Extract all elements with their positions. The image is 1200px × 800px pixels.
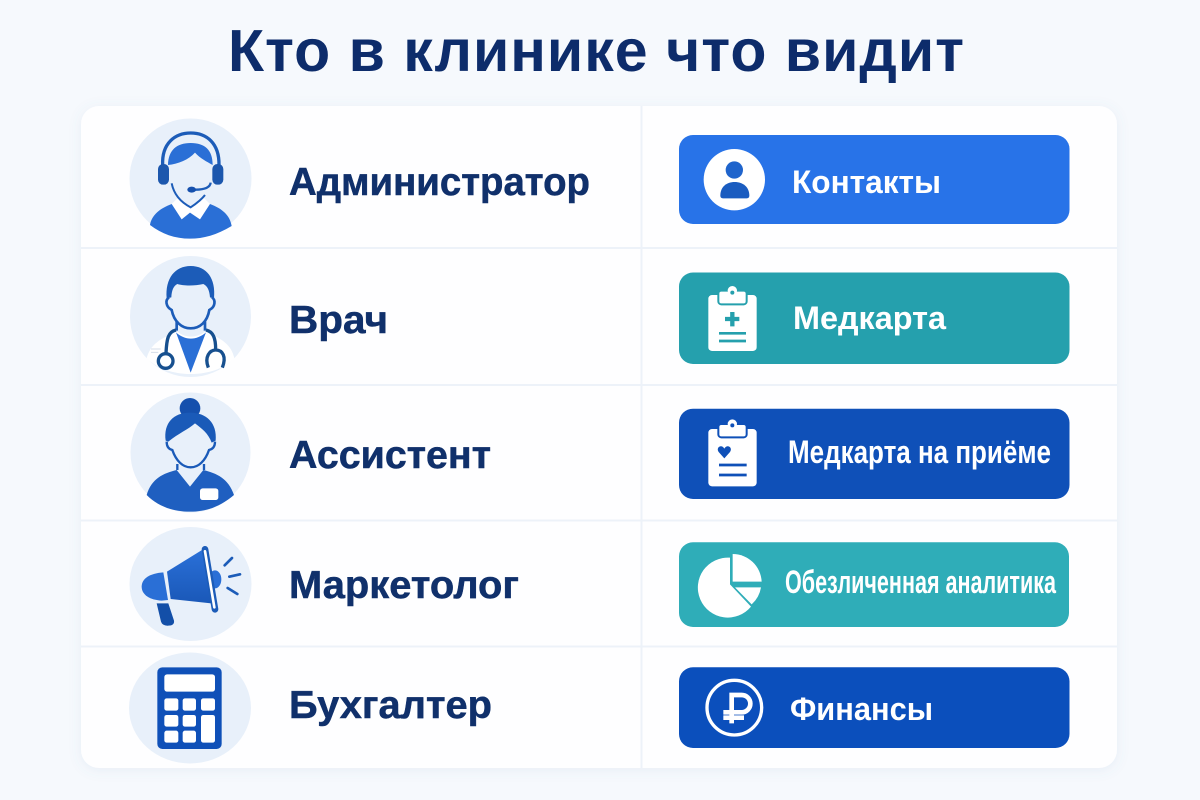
access tag: medical record: Медкарта (793, 300, 946, 336)
row: accountant (129, 652, 1070, 764)
row: assistant (130, 392, 1070, 512)
access tag: anonymized analytics: Обезличенная аналитика (785, 564, 1056, 600)
label: assistant: Ассистент (289, 434, 491, 477)
label: administrator: Администратор (289, 161, 590, 204)
icon: calculator (129, 652, 251, 764)
row: doctor (130, 256, 1070, 377)
access tag: finances: Финансы (790, 691, 933, 727)
access tag: finances (679, 667, 1070, 748)
title: Кто в клинике что видит (228, 18, 964, 84)
access tag: medical record (679, 272, 1070, 364)
access tag: record at appointment: Медкарта на приёме (788, 434, 1051, 470)
label: doctor: Врач (289, 299, 388, 342)
icon: assistant with hair bun (130, 392, 250, 512)
label: marketer: Маркетолог (289, 564, 519, 607)
label: accountant: Бухгалтер (289, 684, 492, 727)
icon: administrator with headset (130, 118, 252, 239)
row: administrator (130, 118, 1070, 239)
panel: access table (81, 106, 1117, 768)
access tag: record at appointment (679, 409, 1070, 499)
access tag: anonymized analytics (679, 542, 1069, 627)
icon: megaphone (130, 527, 252, 641)
icon: doctor with stethoscope (130, 256, 251, 377)
access tag: contacts: Контакты (792, 164, 941, 200)
row: marketer (130, 527, 1069, 641)
access tag: contacts (679, 135, 1070, 224)
